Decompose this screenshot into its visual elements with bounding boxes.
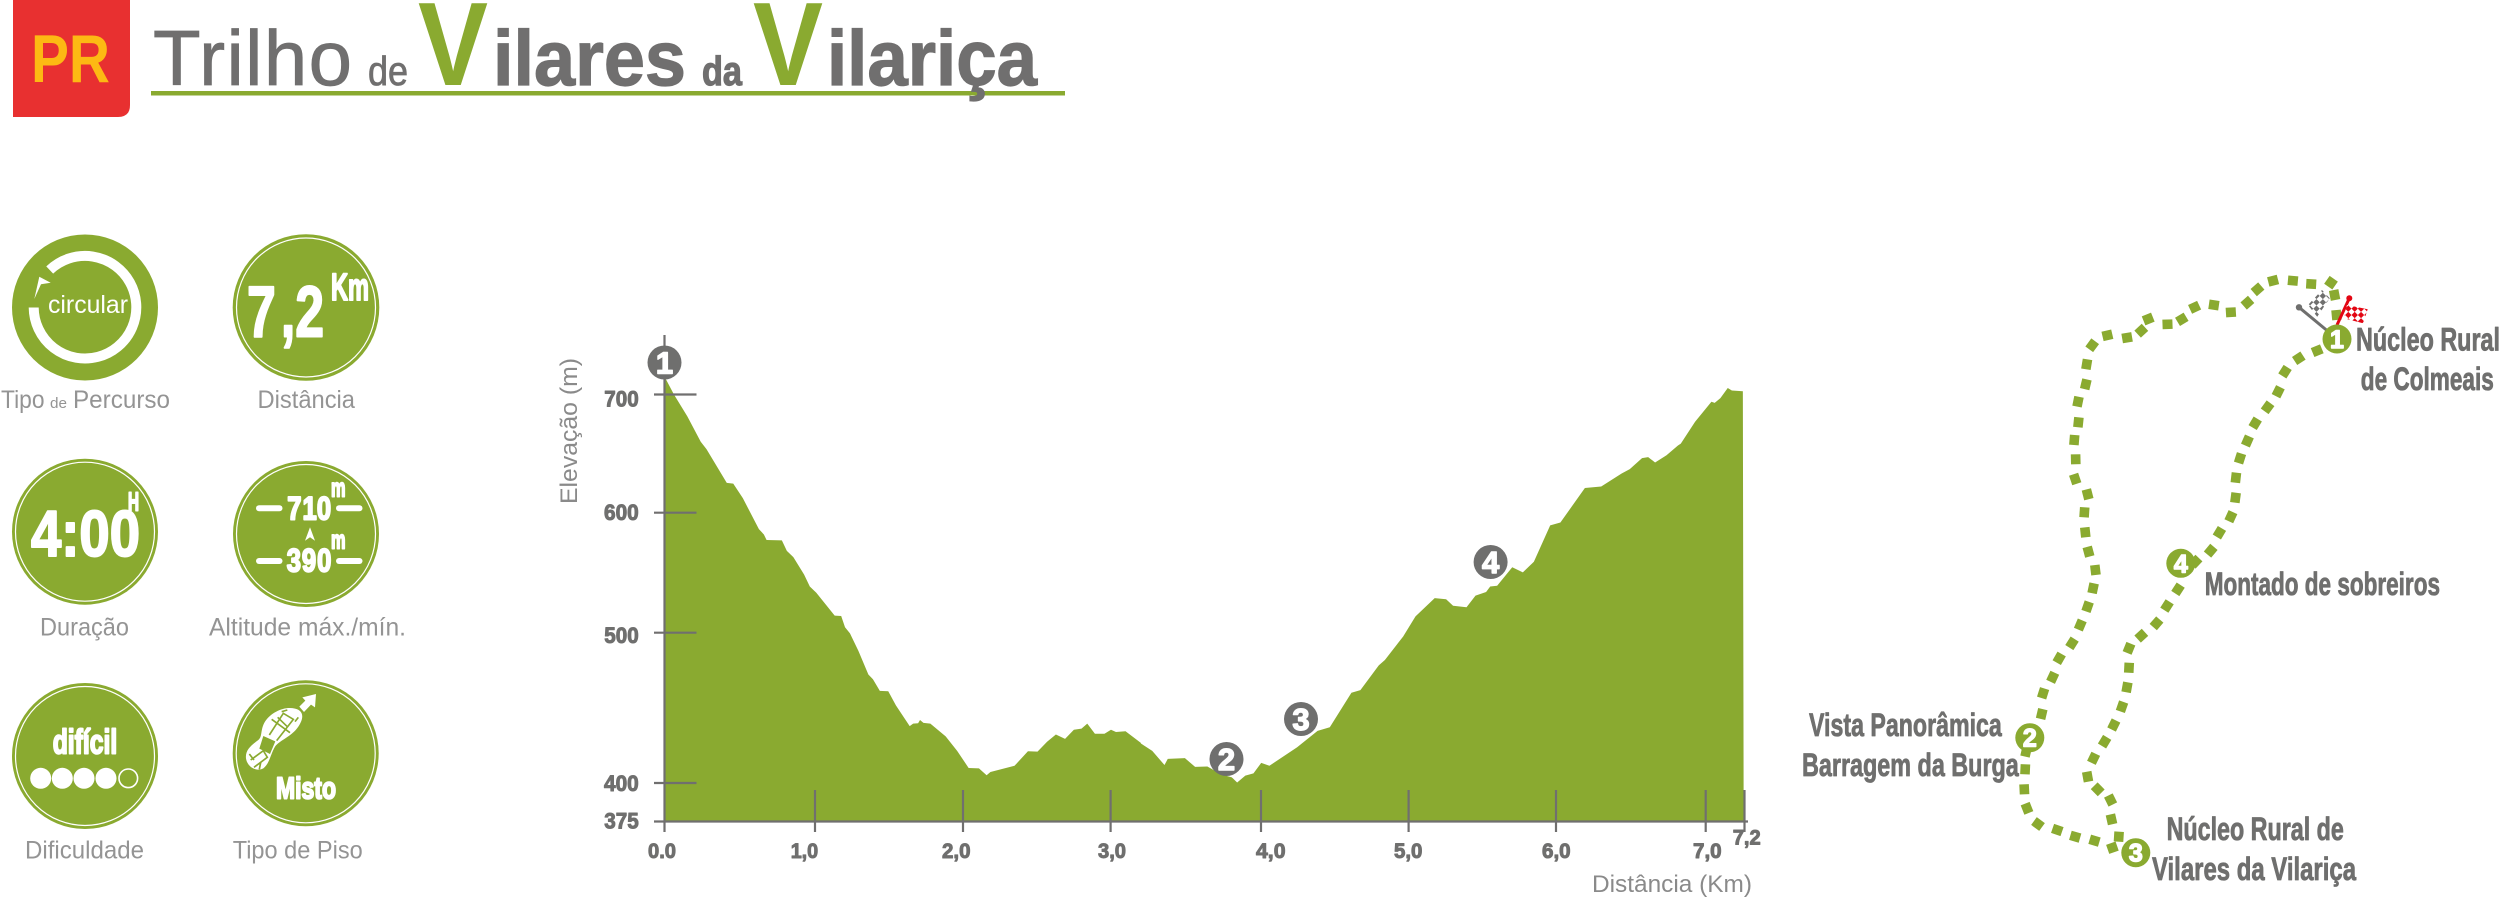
icon: altitude 710 / 390: 390 [287, 544, 331, 579]
icon: altitude 710 / 390: m [331, 473, 346, 503]
chart marker 2 [1210, 742, 1244, 777]
label: tipo de piso: Tipo de Piso [233, 836, 363, 864]
chart marker 4: 4 [1482, 545, 1500, 580]
x axis labels: 5,0 [1394, 840, 1422, 863]
route map [1802, 281, 2500, 887]
place label: Nucleo Rural de Colmeais [2356, 322, 2500, 397]
PR badge [13, 0, 130, 117]
map marker 3: 3 [2129, 840, 2143, 868]
label: duracao: Duração [40, 614, 129, 642]
elevation chart [556, 335, 1761, 898]
place label: Nucleo Rural de Vilares da Vilarica: Vilares da Vilariça [2152, 851, 2356, 887]
map marker 2: 2 [2023, 725, 2037, 753]
y axis labels: 400 [604, 771, 639, 796]
icon: altitude 710 / 390 [233, 461, 379, 607]
map marker 2 [2015, 723, 2044, 753]
x axis labels: 7,2 [1733, 826, 1761, 849]
icon: 4:00 h: 4:00 [31, 497, 140, 570]
icon: altitude 710 / 390: m [331, 524, 346, 554]
label: distancia: Distância [258, 386, 355, 414]
title: de [368, 48, 408, 94]
stat: tipo de piso [233, 680, 379, 864]
place label: Vista Panoramica: Barragem da Burga [1802, 747, 2019, 783]
chart marker 3 [1284, 702, 1318, 737]
icon: start and finish flags [2296, 290, 2368, 330]
x axis labels: 2,0 [942, 840, 970, 863]
y axis labels: 500 [604, 623, 639, 648]
label: altitude: Altitude máx./mín. [209, 614, 406, 642]
chart area: elevation profile [664, 375, 1744, 821]
y axis labels: 375 [604, 808, 639, 833]
x axis labels: 7,0 [1693, 840, 1722, 863]
x axis labels: 0.0 [648, 840, 676, 863]
chart marker 4 [1474, 545, 1508, 580]
title: ilares [493, 14, 686, 102]
icon: 7,2 km [233, 234, 379, 381]
icon: shoe sole, misto [233, 680, 379, 826]
stat: distancia [233, 234, 379, 414]
chart marker 3: 3 [1292, 702, 1310, 737]
place label: Nucleo Rural de Vilares da Vilarica: Núcleo Rural de [2167, 811, 2344, 847]
place label: Vista Panoramica [1802, 707, 2019, 783]
x axis labels: 3,0 [1098, 840, 1126, 863]
stat: duracao [12, 459, 158, 642]
stat: dificuldade [12, 683, 158, 864]
dashed route line [2024, 281, 2336, 848]
y axis labels [604, 386, 639, 833]
title: ilariça [827, 14, 1038, 102]
icon: circular route: circular [48, 291, 128, 319]
title: da [702, 48, 743, 94]
icon: 7,2 km: 7,2 [247, 272, 324, 353]
axis title: distancia: Distância (Km) [1592, 871, 1752, 898]
map marker 1 [2322, 324, 2352, 354]
icon: dificil [12, 683, 158, 829]
icon: altitude 710 / 390: 710 [287, 492, 331, 527]
x axis labels: 6,0 [1542, 840, 1571, 863]
icon: 4:00 h [12, 459, 158, 605]
y axis labels: 700 [604, 386, 639, 412]
x axis labels: 1,0 [791, 840, 818, 863]
title: Trilho [153, 14, 352, 102]
stat: tipo de percurso [1, 234, 170, 414]
label: tipo de percurso: Tipo [1, 386, 44, 414]
place label: Vista Panoramica: Vista Panorâmica [1809, 707, 2002, 743]
x axis labels [648, 826, 1761, 863]
map marker 3 [2121, 838, 2150, 868]
PR badge: PR [31, 21, 110, 97]
chart marker 1 [648, 346, 682, 380]
label: tipo de percurso: de [50, 395, 67, 412]
place label: Nucleo Rural de Vilares da Vilarica [2152, 811, 2356, 887]
icon: dificil: difícil [53, 723, 117, 761]
chart marker 2: 2 [1218, 742, 1235, 777]
stat: altitude [209, 461, 406, 642]
map marker 4: 4 [2174, 550, 2188, 578]
label: tipo de percurso: Percurso [73, 386, 170, 414]
axis title: elevacao: Elevação (m) [556, 358, 583, 504]
x axis labels: 4,0 [1256, 840, 1286, 863]
title [151, 0, 1065, 111]
label: tipo de percurso [1, 386, 170, 414]
map marker 1: 1 [2330, 326, 2344, 354]
icon: 4:00 h: H [128, 487, 139, 517]
icon: 7,2 km: Km [331, 267, 369, 309]
map marker 4 [2166, 549, 2195, 578]
y axis labels: 600 [604, 500, 639, 525]
chart marker 1: 1 [656, 346, 673, 380]
icon: shoe sole, misto: Misto [276, 770, 336, 805]
label: dificuldade: Dificuldade [25, 836, 144, 864]
icon: circular route [12, 234, 158, 380]
